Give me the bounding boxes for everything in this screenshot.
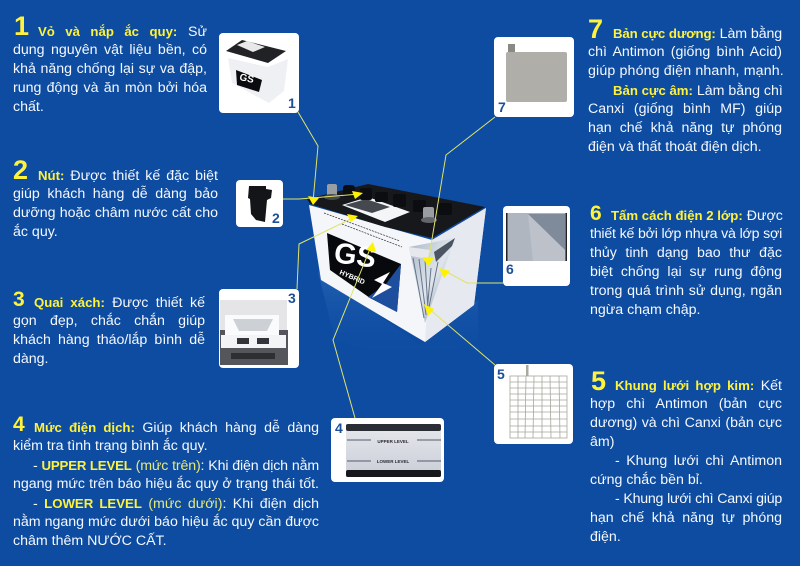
battery illustration: HYBRID	[338, 269, 366, 286]
card 6: separator sheet: 6	[506, 261, 514, 277]
text block 5: alloy grid: - Khung lưới chì Canxi giúp	[615, 491, 782, 507]
text block 4: electrolyte level: - UPPER LEVEL (mức trên): Khi điện dịch nằm	[33, 458, 319, 474]
text block 7: plates: điện và thất thoát điện dịch.	[588, 139, 762, 155]
text block 7: plates: giúp phóng điện nhanh, mạnh.	[588, 63, 784, 79]
text block 5: alloy grid: hợp chì Antimon (bản cực	[590, 396, 782, 412]
text block 3: handle: dàng.	[13, 351, 49, 367]
text block 3: handle: khách hàng tháo/lắp bình dễ	[13, 332, 205, 348]
text block 1: case and lid: dụng nguyên vật liệu bền, có	[13, 42, 207, 58]
number 3: 3	[13, 288, 25, 311]
text block 4: electrolyte level: nằm ngang mức dưới báo hiệu ắc quy cần được	[13, 514, 319, 530]
text block 1: case and lid: khả năng chống lại sự va đập,	[13, 61, 207, 77]
text block 2: plug: Nút: Được thiết kế đặc biệt	[38, 168, 218, 184]
text block 2: plug: giúp khách hàng dễ dàng bảo	[13, 186, 218, 202]
icon: terminals and caps	[324, 184, 452, 223]
text block 7: plates: Bản cực dương: Làm bằng	[613, 26, 782, 42]
number 5: 5	[591, 366, 606, 396]
text block 5: alloy grid	[590, 366, 782, 545]
text block 1: case and lid: chất.	[13, 99, 44, 115]
number 7: 7	[588, 14, 603, 44]
text block 6: separator: ngừa chạm chập.	[590, 302, 700, 318]
text block 7: plates	[588, 14, 784, 155]
text block 6: separator: thủy tinh dạng bao thư đặc	[590, 245, 782, 261]
card 5: alloy grid: 5	[497, 366, 505, 382]
card 6: separator sheet	[503, 206, 570, 286]
text block 1: case and lid: rung động và ăn mòn bởi hóa	[13, 80, 207, 96]
card 3: carrying handle: 3	[288, 290, 296, 306]
card 4: electrolyte level marks: 4	[335, 420, 343, 436]
card 1: battery case and lid	[219, 33, 299, 113]
text block 6: separator: Tấm cách điện 2 lớp: Được	[611, 208, 783, 224]
card 2: vent plug	[236, 180, 283, 227]
text block 2: plug: dưỡng hoặc châm nước cất cho	[13, 205, 218, 221]
number 2: 2	[13, 155, 28, 185]
text block 5: alloy grid: hạn chế khả năng tự phóng	[590, 510, 782, 526]
number 6: 6	[590, 202, 602, 225]
text block 4: electrolyte level: ngang mức trên báo hiệu ắc quy ở trạng thái tốt.	[13, 476, 319, 492]
text block 4: electrolyte level: châm thêm NƯỚC CẤT.	[13, 533, 167, 549]
text block 6: separator: trong quá trình sử dụng, ngăn	[590, 283, 782, 299]
text block 6: separator	[590, 202, 783, 318]
text block 4: electrolyte level: Mức điện dịch: Giúp khách hàng dễ dàng	[34, 420, 319, 436]
text block 2: plug: ắc quy.	[13, 224, 58, 240]
card 2: vent plug: 2	[272, 210, 280, 226]
text block 5: alloy grid: - Khung lưới chì Antimon	[615, 453, 782, 469]
text block 1: case and lid	[13, 11, 208, 115]
text block 5: alloy grid: dương) và chì Canxi (bản cực	[590, 415, 782, 431]
card 4: electrolyte level marks: LOWER LEVEL	[377, 459, 410, 464]
text block 4: electrolyte level: - LOWER LEVEL (mức dưới): Khi điện dịch	[33, 496, 319, 512]
card 7: lead plate: 7	[498, 99, 506, 115]
card 7: lead plate	[494, 37, 574, 117]
number 4: 4	[13, 413, 25, 436]
text block 2: plug	[13, 155, 218, 240]
text block 3: handle	[13, 288, 205, 367]
card 4: electrolyte level marks: UPPER LEVEL	[377, 439, 409, 444]
text block 4: electrolyte level	[13, 413, 319, 549]
card 1: battery case and lid: GS	[238, 72, 255, 86]
text block 6: separator: biệt chống lại sự rung động	[590, 264, 782, 280]
text block 6: separator: thiết kế bởi lớp nhựa và lớp sợi	[590, 226, 782, 242]
text block 5: alloy grid: âm)	[590, 434, 614, 450]
text block 5: alloy grid: cứng chắc bền bỉ.	[590, 472, 703, 488]
text block 7: plates: hạn chế khả năng tự phóng	[588, 120, 782, 136]
text block 5: alloy grid: Khung lưới hợp kim: Kết	[615, 378, 782, 394]
text block 3: handle: gọn đẹp, chắc chắn giúp	[13, 313, 205, 329]
battery illustration: GS	[332, 237, 378, 275]
number 1: 1	[14, 11, 29, 41]
text block 5: alloy grid: điện.	[590, 529, 621, 545]
card 1: battery case and lid: 1	[288, 95, 296, 111]
text block 1: case and lid: Vỏ và nắp ắc quy: Sử	[38, 24, 207, 40]
card 4: electrolyte level marks	[331, 418, 444, 482]
text block 7: plates: Bản cực âm: Làm bằng chì	[613, 83, 783, 99]
card 3: carrying handle	[219, 289, 299, 368]
text block 3: handle: Quai xách: Được thiết kế	[34, 295, 205, 311]
text block 7: plates: Canxi (giống bình MF) giúp	[588, 101, 782, 117]
text block 4: electrolyte level: kiểm tra tình trạng bình ắc quy.	[13, 438, 208, 454]
card 5: alloy grid	[494, 364, 573, 444]
text block 7: plates: chì Antimon (giống bình Acid)	[588, 44, 782, 60]
